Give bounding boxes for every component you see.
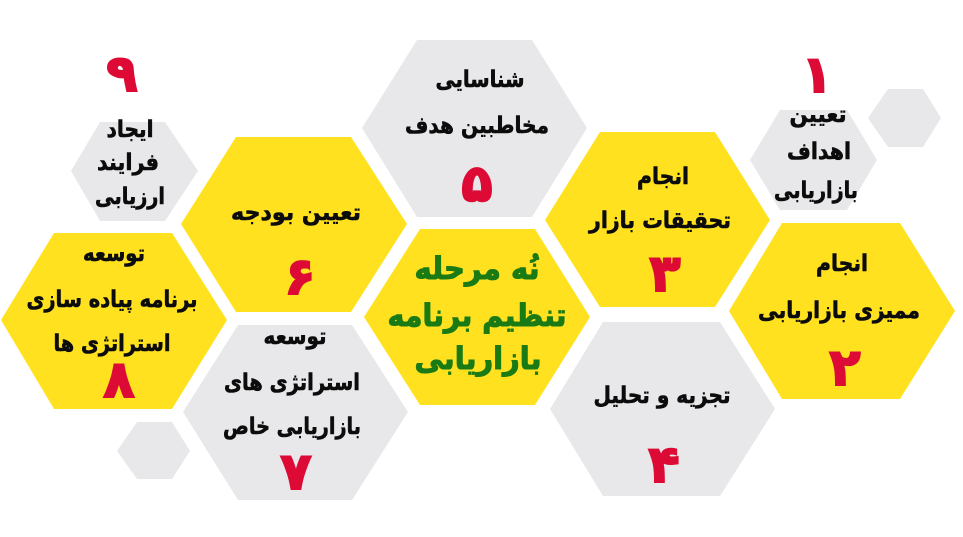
panel: step 7 [183, 324, 408, 502]
panel: step 8 [1, 233, 227, 410]
step 1 text: اهداف [787, 139, 851, 165]
decorative hexagon: top right [868, 89, 941, 147]
panel: step 6 [181, 137, 407, 312]
step 7 text: استراتژی های [224, 370, 360, 396]
decorative hexagon: bottom left [117, 422, 190, 479]
step 7 text: بازاریابی خاص [223, 414, 361, 440]
step 3 text [588, 164, 731, 234]
panel: step 5 [362, 40, 587, 217]
panel: step 2 [729, 223, 955, 399]
centre title text: تنظیم برنامه [388, 298, 566, 334]
step 3 text: انجام [637, 164, 689, 190]
step 5 text: مخاطبین هدف [405, 113, 549, 139]
centre title text [388, 251, 566, 377]
step 9 text: ارزیابی [95, 184, 165, 210]
step 2 text: ممیزی بازاریابی [758, 298, 920, 324]
step 7 number: ۷ [280, 443, 312, 502]
step 8 text: برنامه پیاده سازی [26, 287, 198, 313]
step 8 text: توسعه [83, 241, 145, 267]
centre title text: بازاریابی [414, 341, 542, 377]
step 2 text: انجام [816, 251, 868, 277]
step 6 number: ۶ [284, 248, 316, 307]
step 7 text [223, 324, 361, 440]
step 6 text: تعیین بودجه [231, 200, 361, 226]
step 9 text: فرایند [97, 150, 159, 176]
step 4 number: ۴ [648, 436, 680, 495]
step 9 text [95, 117, 165, 210]
step 1 number: ۱ [801, 46, 833, 105]
step 5 text [405, 67, 549, 139]
step 8 text [26, 241, 198, 357]
panel: step 4 [550, 322, 775, 496]
panel: centre title [364, 229, 590, 405]
step 1 text: تعیین [790, 102, 846, 128]
step 9 text: ایجاد [106, 117, 154, 143]
step 5 text: شناسایی [436, 67, 524, 93]
step 2 text [758, 251, 920, 324]
panel: step 3 [545, 132, 770, 307]
step 8 number: ۸ [103, 351, 135, 410]
step 9 number: ۹ [106, 45, 138, 104]
step 3 number: ۳ [649, 245, 681, 304]
step 8 text: استراتژی ها [54, 331, 170, 357]
centre title text: نُه مرحله [414, 251, 540, 287]
step 7 text: توسعه [264, 324, 326, 350]
panel: step 9 [71, 45, 198, 221]
step 5 number: ۵ [461, 155, 493, 214]
panel: step 1 [750, 46, 877, 210]
step 3 text: تحقیقات بازار [588, 208, 731, 234]
step 4 text: تجزیه و تحلیل [594, 383, 730, 409]
step 1 text: بازاریابی [774, 178, 858, 204]
step 2 number: ۲ [829, 339, 861, 398]
step 1 text [774, 102, 858, 204]
